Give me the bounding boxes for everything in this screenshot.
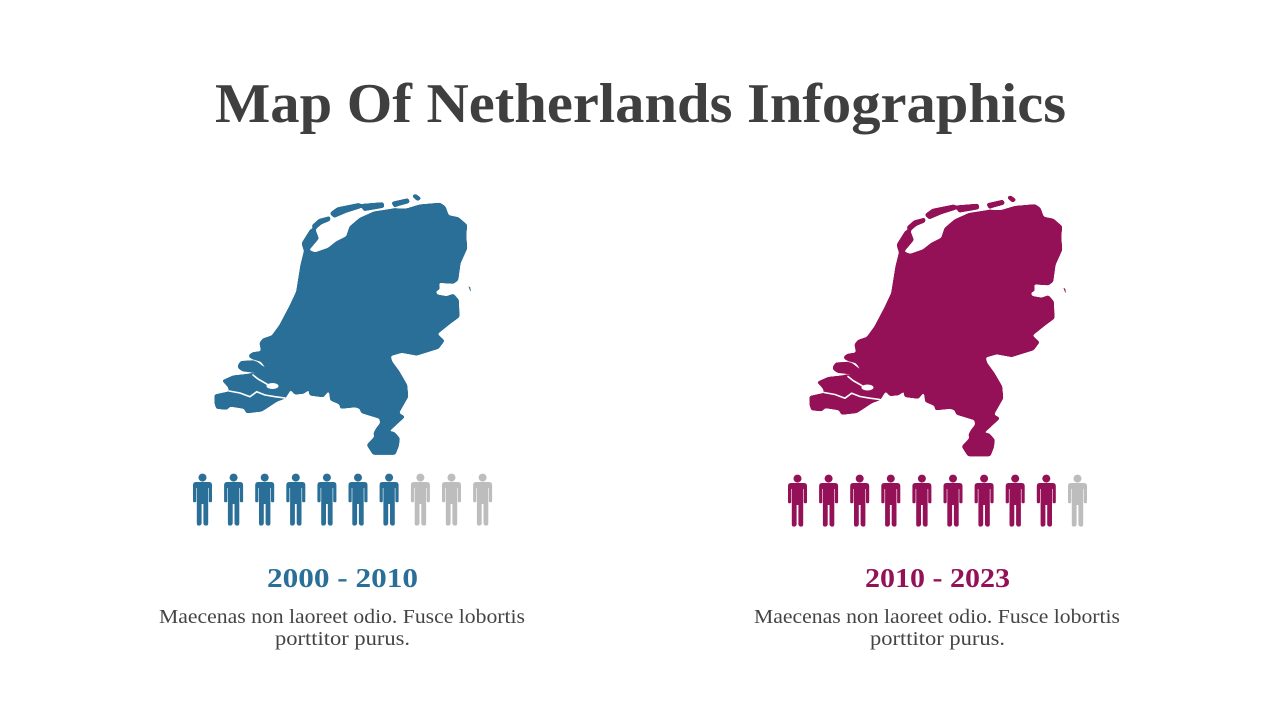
text block [159,606,525,650]
text block: porttitor purus. [870,628,1005,650]
people row: 9 of 10 highlighted [788,475,1087,527]
people row: 7 of 10 highlighted [193,474,492,526]
heading: 2010 - 2023: 2010 - 2023 [865,563,1010,593]
map: Netherlands magenta [810,196,1066,456]
title: Map Of Netherlands Infographics [215,73,1066,135]
text block [754,606,1120,650]
heading: 2000 - 2010: 2000 - 2010 [267,563,418,593]
text block: Maecenas non laoreet odio. Fusce lobortis [754,606,1120,628]
map: Netherlands blue [215,195,470,454]
text block: porttitor purus. [275,628,410,650]
panel: 2000 - 2010 [159,195,525,650]
text block: Maecenas non laoreet odio. Fusce lobortis [159,606,525,628]
panel: 2010 - 2023 [754,196,1120,650]
